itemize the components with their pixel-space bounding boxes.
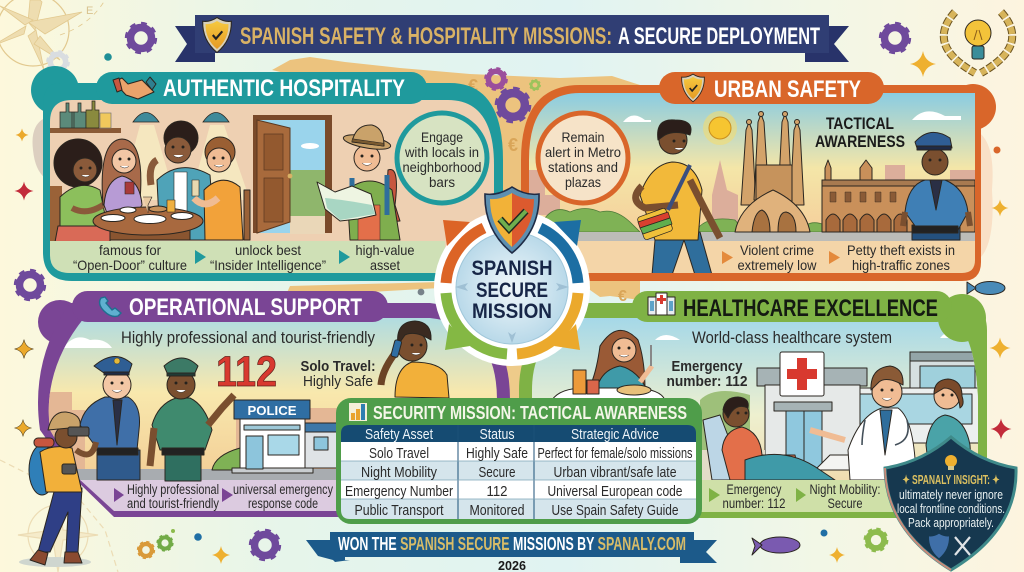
header text: URBAN SAFETY bbox=[714, 76, 861, 103]
header pill bbox=[659, 72, 884, 104]
person: nurse bbox=[926, 379, 972, 480]
panel: urban safety bbox=[521, 72, 996, 281]
callout: remain alert: plazas bbox=[565, 174, 601, 190]
panel: authentic hospitality bbox=[31, 66, 503, 281]
cloud bbox=[63, 337, 112, 348]
clouds bbox=[655, 334, 948, 340]
person: man with orange shirt bbox=[192, 137, 250, 240]
person: man with teal shirt bbox=[150, 121, 215, 240]
label: emergency number bbox=[666, 358, 748, 390]
person: woman with long hair bbox=[102, 139, 142, 216]
label: solo travel: Solo Travel: bbox=[300, 358, 376, 375]
callout: engage: with locals in bbox=[404, 144, 479, 160]
map strip behind hub bbox=[500, 335, 528, 405]
hospital red cross sign bbox=[780, 352, 824, 396]
header text: OPERATIONAL SUPPORT bbox=[129, 294, 362, 321]
data table: Status bbox=[480, 426, 514, 443]
callout: remain alert: alert in Metro bbox=[545, 144, 621, 160]
ring arrows bbox=[446, 228, 578, 354]
person: green police officer bbox=[150, 358, 234, 481]
person: explorer with map bbox=[317, 125, 400, 240]
scene: hospital bbox=[525, 318, 990, 513]
hub title: MISSION bbox=[472, 300, 552, 323]
compass letter E: E bbox=[86, 5, 93, 17]
compass rose top-left bbox=[0, 0, 105, 70]
label: solo travel: Highly Safe bbox=[303, 373, 373, 390]
insight shield bbox=[885, 437, 1016, 570]
scene: Barcelona street bbox=[525, 90, 980, 275]
shelf with bottles bbox=[50, 101, 121, 133]
label: solo travel bbox=[300, 358, 376, 390]
title banner bbox=[175, 15, 849, 62]
person: dining woman bbox=[552, 330, 665, 400]
data table: Safety Asset bbox=[365, 426, 434, 443]
hub title bbox=[472, 257, 552, 323]
person: patient in chair bbox=[703, 397, 835, 480]
icon: orange header shield bbox=[682, 74, 704, 102]
lamps and light bbox=[132, 112, 246, 200]
decoration: stars and dots: € bbox=[468, 76, 478, 96]
strip: hospitality facts: famous for bbox=[99, 242, 161, 258]
header pill bbox=[96, 72, 427, 104]
callout: engage bbox=[397, 113, 487, 203]
ground bbox=[578, 232, 975, 241]
data table: Night Mobility bbox=[361, 464, 437, 481]
scene: bar interior bbox=[50, 95, 500, 275]
decoration: stars and dots: € bbox=[618, 288, 627, 305]
table title: SECURITY MISSION: TACTICAL AWARENESS bbox=[373, 403, 687, 423]
strip: hospitality facts: unlock best bbox=[235, 242, 301, 258]
person: doctor bbox=[810, 366, 916, 480]
laurel and lightbulb emblem bbox=[944, 12, 1012, 73]
person: walking man with rainbow bag bbox=[636, 120, 720, 275]
fish: bottom purple bbox=[752, 537, 800, 555]
panel: security mission table bbox=[336, 398, 702, 524]
map of Spain backdrop bbox=[272, 57, 640, 300]
strip: hospitality facts: “Insider Intelligence” bbox=[210, 257, 326, 273]
header pill bbox=[72, 291, 388, 322]
palace building bbox=[822, 160, 975, 232]
header text: HEALTHCARE EXCELLENCE bbox=[683, 295, 938, 322]
hub title: SPANISH bbox=[472, 257, 552, 280]
insight body: Pack appropriately. bbox=[908, 515, 994, 530]
icon: small shield and swords bbox=[929, 534, 970, 558]
tactical awareness label bbox=[815, 114, 905, 151]
data table: Perfect for female/solo missions bbox=[538, 445, 692, 462]
label: emergency number: Emergency bbox=[672, 358, 743, 375]
data table: Public Transport bbox=[354, 502, 444, 519]
pale blob behind urban panel bbox=[975, 130, 993, 262]
door bbox=[253, 115, 332, 234]
header pill bbox=[632, 291, 952, 322]
callout: engage: Engage bbox=[421, 129, 463, 145]
skyline bbox=[46, 392, 340, 470]
data table: Emergency Number bbox=[345, 483, 453, 500]
title banner: A SECURE DEPLOYMENT bbox=[618, 23, 820, 50]
Sagrada Familia bbox=[735, 112, 810, 232]
strip: hospitality facts: high-value bbox=[356, 242, 415, 258]
footer ribbon bbox=[306, 532, 717, 563]
icon: hospital bbox=[648, 293, 675, 315]
title text: SPANISH SAFETY & HOSPITALITY MISSIONS: bbox=[240, 23, 612, 50]
strip: urban safety facts: high-traffic zones bbox=[852, 257, 950, 273]
icon: title shield bbox=[203, 18, 231, 52]
scene: police street bbox=[40, 310, 510, 512]
callout: remain alert: stations and bbox=[548, 159, 618, 175]
fish: top right bbox=[967, 282, 1005, 294]
ground bbox=[77, 469, 336, 481]
footer text: WON THE SPANISH SECURE MISSIONS BY SPANALY.COM bbox=[338, 534, 686, 554]
strip: urban safety facts: Violent crime bbox=[740, 242, 814, 258]
callout: engage: bars bbox=[429, 174, 455, 190]
data table bbox=[341, 425, 696, 519]
tactical awareness label: AWARENESS bbox=[815, 132, 905, 151]
data table: Monitored bbox=[470, 502, 524, 519]
icon: bar chart bbox=[349, 403, 367, 421]
tactical awareness label: TACTICAL bbox=[826, 114, 894, 133]
insight body bbox=[897, 487, 1005, 530]
strip: healthcare facts: Secure bbox=[828, 496, 862, 511]
strip: operational facts: universal emergency bbox=[233, 482, 333, 497]
strip: urban safety facts: Petty theft exists in bbox=[847, 242, 955, 258]
skyline bbox=[529, 160, 975, 225]
icon: insight bulb bbox=[945, 455, 957, 470]
central hub bbox=[434, 187, 590, 366]
label: emergency number: number: 112 bbox=[666, 373, 748, 390]
icon: hub shield bbox=[485, 187, 539, 253]
panel: operational support bbox=[38, 291, 510, 517]
data table: Strategic Advice bbox=[571, 426, 659, 443]
green header bump bbox=[938, 294, 986, 342]
data table: Universal European code bbox=[548, 483, 682, 500]
strip: healthcare facts: Emergency bbox=[726, 482, 782, 497]
strip: urban safety facts: extremely low bbox=[738, 257, 817, 273]
strip: operational facts: and tourist-friendly bbox=[127, 496, 219, 511]
label: police sign: POLICE bbox=[248, 403, 297, 418]
clouds bbox=[623, 111, 961, 122]
strip: hospitality facts: asset bbox=[370, 257, 400, 273]
header text: AUTHENTIC HOSPITALITY bbox=[163, 75, 405, 102]
callout: remain alert: Remain bbox=[562, 129, 604, 145]
data table: 112 bbox=[486, 483, 508, 500]
person: tourist with camera bbox=[19, 412, 96, 567]
person: man on phone bbox=[381, 321, 449, 398]
disc compass ticks bbox=[455, 283, 569, 343]
data table: Highly Safe bbox=[466, 445, 528, 462]
icon: handshake bbox=[113, 77, 156, 99]
bench bbox=[50, 186, 62, 241]
bushes bbox=[545, 208, 825, 232]
police station bbox=[212, 400, 341, 473]
person: police officer bbox=[903, 132, 970, 240]
strip: operational facts: response code bbox=[248, 496, 318, 511]
panel: healthcare excellence bbox=[519, 291, 990, 518]
strip: healthcare facts bbox=[709, 482, 880, 511]
icon: phone bbox=[100, 297, 121, 316]
map compass bottom-left bbox=[0, 460, 118, 572]
strip: healthcare facts: Night Mobility: bbox=[810, 482, 880, 497]
data table: Urban vibrant/safe late bbox=[554, 464, 676, 481]
callout: engage: neighborhood bbox=[402, 159, 482, 175]
data table: Use Spain Safety Guide bbox=[552, 502, 678, 519]
strip: operational facts: Highly professional bbox=[127, 482, 219, 497]
person: woman with afro bbox=[54, 139, 113, 242]
hospital building bbox=[757, 352, 980, 470]
subtitle: professional: Highly professional and tourist-friendly bbox=[121, 328, 375, 347]
strip: hospitality facts bbox=[50, 241, 445, 273]
trees bbox=[700, 391, 750, 450]
data table: Solo Travel bbox=[369, 445, 429, 462]
hub title: SECURE bbox=[476, 279, 548, 302]
strip: hospitality facts: “Open-Door” culture bbox=[73, 257, 187, 273]
person: blue police officer bbox=[80, 356, 140, 480]
pale blob behind hospitality panel bbox=[32, 118, 45, 178]
subtitle: world class: World-class healthcare system bbox=[692, 328, 892, 347]
emergency number 112: 112 bbox=[216, 348, 277, 396]
data table: Secure bbox=[478, 464, 516, 481]
arrow heads bbox=[443, 220, 581, 350]
callout: remain alert bbox=[538, 113, 628, 203]
strip: urban safety facts bbox=[722, 242, 955, 273]
decoration: stars and dots: € bbox=[508, 135, 518, 155]
table with tapas bbox=[93, 197, 203, 240]
strip: operational facts bbox=[114, 482, 333, 511]
strip: healthcare facts: number: 112 bbox=[722, 496, 786, 511]
sun bbox=[703, 111, 737, 145]
